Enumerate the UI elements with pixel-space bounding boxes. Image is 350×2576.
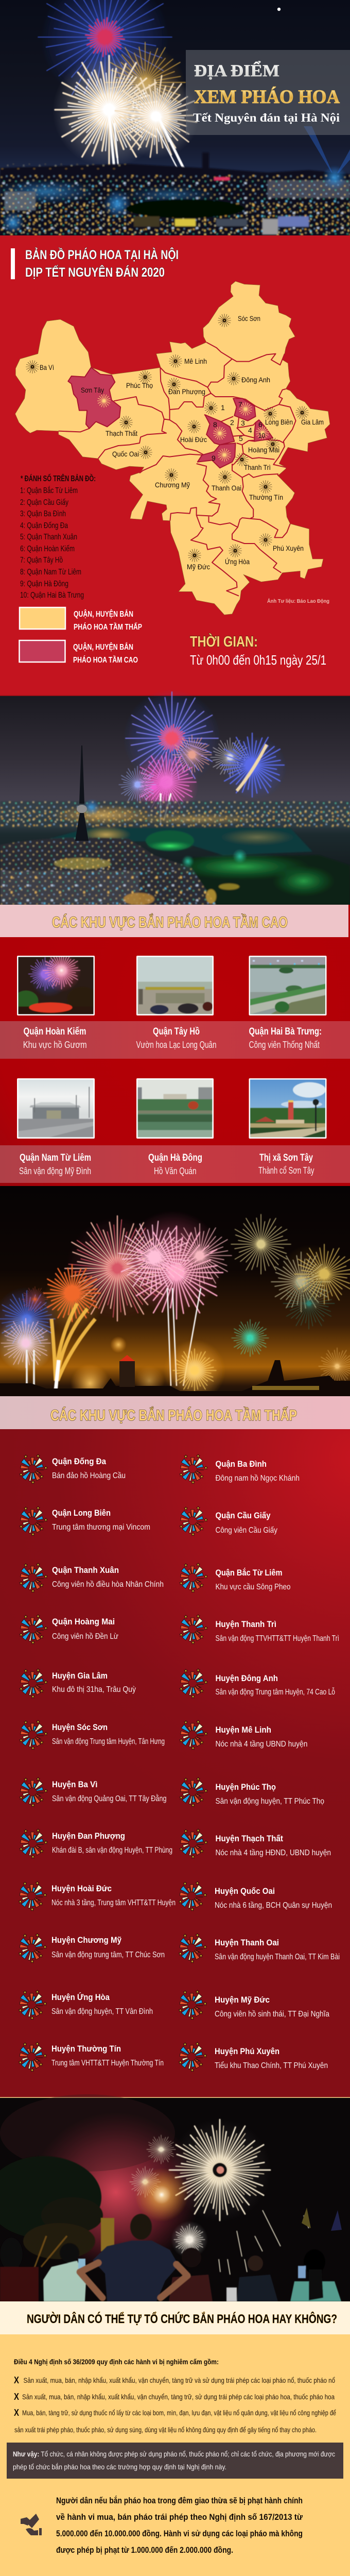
location: Thanh Xuân: Công viên hồ điều hòa Nhân Chính [52, 1580, 164, 1589]
person: man with hands on hips [80, 2214, 187, 2301]
location: Long Biên: Trung tâm thương mại Vincom [52, 1523, 150, 1532]
person: man in pale shirt [43, 2243, 86, 2301]
low-altitude firework markers [26, 314, 309, 562]
title: Xem pháo hoa: XEM PHÁO HOA [194, 86, 340, 108]
numbered district list [20, 473, 96, 600]
photo: Nam Từ Liêm [17, 1078, 95, 1139]
location: Mỹ Đức [179, 1990, 329, 2020]
district labels: Hoài Đức [180, 435, 207, 444]
district labels: 5 [239, 434, 243, 443]
location: Bắc Từ Liêm: Khu vực cầu Sông Pheo [215, 1583, 291, 1591]
numbered district list: 5: Quận Thanh Xuân [20, 533, 77, 541]
location: Ba Vì: Sân vận động Quảng Oai, TT Tây Đằng [52, 1793, 167, 1803]
caption: Tây Hồ: Quận Tây Hồ [153, 1026, 200, 1037]
high-altitude firework markers [97, 394, 269, 462]
legend: low altitude: QUẬN, HUYỆN BẮN [74, 609, 133, 619]
TV tower [75, 745, 89, 841]
location: Thường Tín: Trung tâm VHTT&TT Huyện Thường Tín [51, 2059, 164, 2067]
location: Thanh Trì [180, 1615, 339, 1644]
district labels: Sơn Tây [81, 386, 104, 394]
district labels: Phúc Thọ [126, 381, 153, 389]
district labels: 2 [230, 418, 234, 427]
caption: Hoàn Kiếm [23, 1026, 87, 1050]
district labels: Quốc Oai [112, 450, 139, 458]
district labels: Hoàng Mai [248, 446, 279, 454]
display time [190, 633, 326, 668]
location: Thanh Oai [179, 1934, 340, 1963]
district labels: Ứng Hòa [225, 557, 250, 566]
caption band row 2 [0, 1145, 350, 1183]
icon: money exchanged between hands [21, 2514, 42, 2535]
location: Cầu Giấy [180, 1506, 277, 1536]
location: Gia Lâm [20, 1669, 136, 1698]
numbered district list: 3: Quận Ba Đình [20, 510, 66, 518]
caption: Nam Từ Liêm: Sân vận động Mỹ Đình [19, 1166, 91, 1176]
caption: Hoàn Kiếm: Khu vực hồ Gươm [23, 1040, 87, 1050]
location: Ba Đình: Đông nam hồ Ngọc Khánh [215, 1474, 300, 1483]
location: Hoài Đức: Nóc nhà 3 tầng, Trung tâm VHTT&TT Huyện [51, 1899, 176, 1907]
person: woman in red dress [169, 2248, 213, 2301]
photo: fireworks over West Lake [0, 689, 350, 905]
numbered district list: 8: Quận Nam Từ Liêm [20, 568, 81, 577]
location: Ứng Hòa: Huyện Ứng Hòa [51, 1992, 110, 2002]
red smoke glow [31, 2112, 201, 2272]
decree heading: Điều 4 Nghị định số 36/2009 quy định các hành vi bị nghiêm cấm gồm: [14, 2358, 219, 2366]
location: Long Biên [20, 1506, 150, 1536]
small fireworks and hot spot [130, 2135, 309, 2275]
fireworks [119, 689, 287, 824]
numbered district list: 6: Quận Hoàn Kiếm [20, 545, 75, 553]
caption: Nam Từ Liêm [19, 1153, 91, 1176]
location: Thạch Thất [180, 1829, 331, 1858]
location: Chương Mỹ: Huyện Chương Mỹ [51, 1935, 121, 1945]
caption: Hai Bà Trưng [249, 1026, 322, 1050]
location: Đan Phượng: Huyện Đan Phượng [52, 1831, 125, 1841]
legend: low altitude [20, 607, 142, 632]
hero photo: fireworks above Hanoi [0, 0, 350, 235]
legend: high altitude: QUẬN, HUYỆN BẮN [73, 642, 133, 652]
city and lake [0, 799, 350, 905]
firework: large white bursts [52, 54, 202, 167]
district labels: 3 [241, 419, 245, 427]
photo: Tây Hồ [136, 956, 214, 1015]
skyline silhouette [0, 1355, 350, 1396]
heading band: low altitude areas [0, 1396, 350, 1429]
district labels: Đan Phượng [168, 387, 205, 396]
numbered district list: * ĐÁNH SỐ TRÊN BẢN ĐỒ: [21, 473, 96, 483]
district labels: Sóc Sơn [238, 314, 260, 323]
location: Đông Anh [180, 1669, 335, 1698]
location: Mê Linh: Nóc nhà 4 tầng UBND huyện [215, 1740, 308, 1749]
panel: regulations [0, 2334, 350, 2576]
photo: colourful fireworks over city skyline [0, 1186, 350, 1403]
location: Đống Đa [20, 1454, 126, 1484]
district labels: 9 [212, 454, 216, 462]
title: Địa điểm: ĐỊA ĐIỂM [194, 61, 279, 80]
location: Đống Đa: Bán đảo hồ Hoàng Cầu [52, 1471, 126, 1480]
firework: gold burst [105, 42, 185, 125]
prohibited acts list: X [14, 2375, 19, 2385]
photo: crowd watching fireworks [0, 2094, 350, 2301]
location: Thanh Xuân [20, 1563, 164, 1592]
subtitle: Tết Nguyên đán tại Hà Nội [193, 111, 340, 124]
location: Mỹ Đức: Huyện Mỹ Đức [215, 1995, 270, 2005]
caption: Sơn Tây: Thị xã Sơn Tây [259, 1153, 313, 1163]
location: Phú Xuyên: Tiểu khu Thao Chính, TT Phú Xuyên [215, 2061, 328, 2070]
penalty text: Người dân nếu bắn pháo hoa trong đêm giao thừa sẽ bị phạt hành chính [56, 2496, 303, 2505]
caption: Hà Đông: Quận Hà Đông [148, 1153, 202, 1163]
note box: phép tổ chức bắn pháo hoa theo các trường hợp quy định tại Nghị định này. [13, 2463, 226, 2471]
location: Gia Lâm: Huyện Gia Lâm [52, 1671, 108, 1681]
heading band: rules question [0, 2301, 350, 2334]
location: Mỹ Đức: Công viên hồ sinh thái, TT Đại Nghĩa [215, 2010, 329, 2019]
location: Bắc Từ Liêm: Quận Bắc Từ Liêm [215, 1568, 282, 1578]
caption band row 1 [0, 1021, 350, 1059]
legend: high altitude [20, 640, 138, 665]
location: Cầu Giấy: Công viên Cầu Giấy [215, 1526, 277, 1535]
location: Đống Đa: Quận Đống Đa [52, 1456, 106, 1466]
numbered district list: 4: Quận Đống Đa [20, 521, 68, 530]
location: Đan Phượng [20, 1829, 172, 1858]
map heading: BẢN ĐỒ PHÁO HOA TẠI HÀ NỘI [25, 247, 179, 262]
location: Hoài Đức [19, 1882, 176, 1911]
district labels: Đông Anh [241, 376, 270, 384]
district labels: Thạch Thất [106, 429, 137, 437]
numbered district list: 1: Quận Bắc Từ Liêm [20, 485, 78, 495]
location: Mê Linh [180, 1720, 308, 1750]
caption: Nam Từ Liêm: Quận Nam Từ Liêm [20, 1153, 91, 1163]
location: Quốc Oai: Huyện Quốc Oai [215, 1886, 275, 1896]
flags [302, 2208, 342, 2231]
location: Quốc Oai [179, 1882, 332, 1911]
location: Ứng Hòa: Sân vận động huyện, TT Vân Đình [51, 2007, 153, 2016]
district labels: 7 [238, 400, 242, 409]
district labels: 4 [248, 426, 252, 434]
district labels [40, 314, 324, 571]
caption: Tây Hồ [136, 1026, 216, 1050]
district labels: Mê Linh [184, 357, 207, 365]
location: Ba Vì [20, 1777, 167, 1807]
location: Thanh Xuân: Quận Thanh Xuân [52, 1565, 119, 1575]
display time: THỜI GIAN: [190, 633, 258, 650]
map of Hanoi districts [15, 281, 330, 615]
firework: blue burst with red core [38, 0, 172, 104]
district labels: Mỹ Đức [187, 563, 210, 571]
location: Cầu Giấy: Quận Cầu Giấy [215, 1511, 271, 1520]
district labels: Thanh Oai [212, 484, 241, 492]
city skyline [0, 152, 350, 235]
tree silhouette [0, 2156, 114, 2277]
location: Phúc Thọ: Huyện Phúc Thọ [215, 1782, 276, 1792]
location: Sóc Sơn: Sân vận động Trung tâm Huyện, Tân Hưng [52, 1737, 165, 1746]
district labels: 1 [221, 403, 225, 412]
location: Sóc Sơn [20, 1720, 165, 1750]
location: Thường Tín [19, 2042, 164, 2072]
heading band: high altitude areas [0, 905, 350, 937]
location: Phú Xuyên [179, 2042, 328, 2072]
prohibited acts list: X [14, 2408, 19, 2418]
white firework [168, 2119, 271, 2222]
location: Ba Đình: Quận Ba Đình [215, 1459, 267, 1469]
legend: high altitude: PHÁO HOA TẦM CAO [73, 655, 138, 665]
photo: Sơn Tây citadel [249, 1078, 326, 1139]
location: Long Biên: Quận Long Biên [52, 1508, 111, 1518]
penalty text [56, 2496, 303, 2555]
location: Đan Phượng: Khán đài B, sân vận động Huyện, TT Phùng [52, 1846, 172, 1855]
location: Ba Vì: Huyện Ba Vì [52, 1780, 98, 1789]
caption: Hoàn Kiếm: Quận Hoàn Kiếm [24, 1026, 86, 1037]
location: Thạch Thất: Huyện Thạch Thất [215, 1834, 283, 1843]
caption: Tây Hồ: Vườn hoa Lạc Long Quân [136, 1040, 216, 1050]
caption: Hà Đông: Hồ Văn Quán [154, 1166, 197, 1176]
map heading: DỊP TẾT NGUYÊN ĐÁN 2020 [25, 264, 165, 280]
person: woman left [0, 2238, 39, 2301]
district labels: Gia Lâm [301, 418, 324, 426]
district labels: 6 [258, 420, 262, 429]
caption: Sơn Tây [258, 1153, 314, 1176]
panel: high altitude locations [0, 937, 350, 1186]
location: Gia Lâm: Khu đô thị 31ha, Trâu Quỳ [52, 1685, 136, 1694]
prohibited acts list: X [14, 2392, 19, 2402]
district labels: Ba Vì [40, 363, 54, 371]
gold and teal bursts [231, 1214, 350, 1357]
location: Ba Đình [180, 1454, 300, 1484]
location: Phúc Thọ: Sân vận động huyện, TT Phúc Thọ [215, 1797, 324, 1806]
location: Đông Anh: Huyện Đông Anh [215, 1673, 278, 1683]
title panel [186, 50, 350, 135]
location: Thường Tín: Huyện Thường Tín [51, 2044, 121, 2054]
golden ground bursts [71, 1336, 350, 1403]
location: Quốc Oai: Nóc nhà 6 tầng, BCH Quân sự Huyện [215, 1901, 332, 1910]
photo: Thống Nhất park [249, 956, 326, 1015]
location: Hoài Đức: Huyện Hoài Đức [51, 1884, 112, 1893]
photo credit: Ảnh Tư liệu: Báo Lao Động [267, 598, 329, 604]
panel: low altitude locations [0, 1429, 350, 2097]
location: Hoàng Mai: Công viên hồ Đền Lừ [52, 1632, 118, 1641]
district labels: Thường Tín [249, 493, 283, 501]
district labels: 10 [258, 431, 265, 439]
location: Ứng Hòa [19, 1990, 153, 2020]
penalty text: về hành vi mua, bán pháo trái phép theo Nghị định số 167/2013 từ [56, 2512, 303, 2522]
left bursts [0, 1265, 103, 1391]
district labels: Thanh Trì [244, 463, 271, 471]
numbered district list: 9: Quận Hà Đông [20, 580, 68, 588]
district labels: Long Biên [265, 418, 293, 426]
location: Thanh Trì: Huyện Thanh Trì [215, 1619, 276, 1629]
person: man with tablet [226, 2256, 278, 2301]
location: Mê Linh: Huyện Mê Linh [215, 1725, 271, 1735]
location: Phú Xuyên: Huyện Phú Xuyên [215, 2046, 279, 2056]
photo: Hoàn Kiếm [13, 952, 98, 1015]
searchlight beams [304, 126, 350, 178]
person: woman in teal shirt [290, 2249, 341, 2301]
district labels: 8 [213, 420, 217, 429]
crowd [0, 2214, 341, 2301]
caption: Sơn Tây: Thành cổ Sơn Tây [258, 1165, 314, 1176]
location: Bắc Từ Liêm [180, 1563, 291, 1592]
note box [7, 2443, 343, 2479]
location: Hoàng Mai [20, 1615, 118, 1644]
numbered district list: 10: Quận Hai Bà Trưng [20, 591, 84, 600]
legend: low altitude: PHÁO HOA TẦM THẤP [74, 622, 142, 632]
location: Chương Mỹ: Sân vận động trung tâm, TT Chúc Sơn [51, 1951, 165, 1959]
numbered district list: 7: Quận Tây Hồ [20, 556, 63, 565]
caption: Hà Đông [148, 1153, 202, 1176]
firework trails [109, 113, 197, 202]
location: Sóc Sơn: Huyện Sóc Sơn [52, 1722, 108, 1732]
moon [277, 8, 281, 11]
photo: Hà Đông [136, 1078, 214, 1139]
pink bursts [64, 1211, 232, 1321]
location: Phúc Thọ [180, 1777, 324, 1807]
caption: Hai Bà Trưng: Quận Hai Bà Trưng: [249, 1026, 322, 1037]
penalty text: 5.000.000 đến 10.000.000 đồng. Hành vi sử dụng các loại pháo mà không [56, 2529, 303, 2538]
location: Chương Mỹ [19, 1934, 165, 1963]
district labels: Phú Xuyên [273, 544, 304, 552]
location: Thanh Oai: Huyện Thanh Oai [215, 1938, 279, 1947]
map heading [11, 247, 179, 280]
rising trails [167, 1288, 201, 1386]
location: Hoàng Mai: Quận Hoàng Mai [52, 1617, 115, 1626]
district labels: Chương Mỹ [155, 481, 190, 489]
penalty text: được phép bị phạt từ 1.000.000 đến 2.000.000 đồng. [56, 2545, 233, 2555]
numbered district list: 2: Quận Cầu Giấy [20, 498, 68, 507]
prohibited acts list [14, 2375, 336, 2434]
caption: Hai Bà Trưng: Công viên Thống Nhất [249, 1040, 320, 1050]
location: Thạch Thất: Nóc nhà 4 tầng HĐND, UBND huyện [215, 1849, 331, 1857]
